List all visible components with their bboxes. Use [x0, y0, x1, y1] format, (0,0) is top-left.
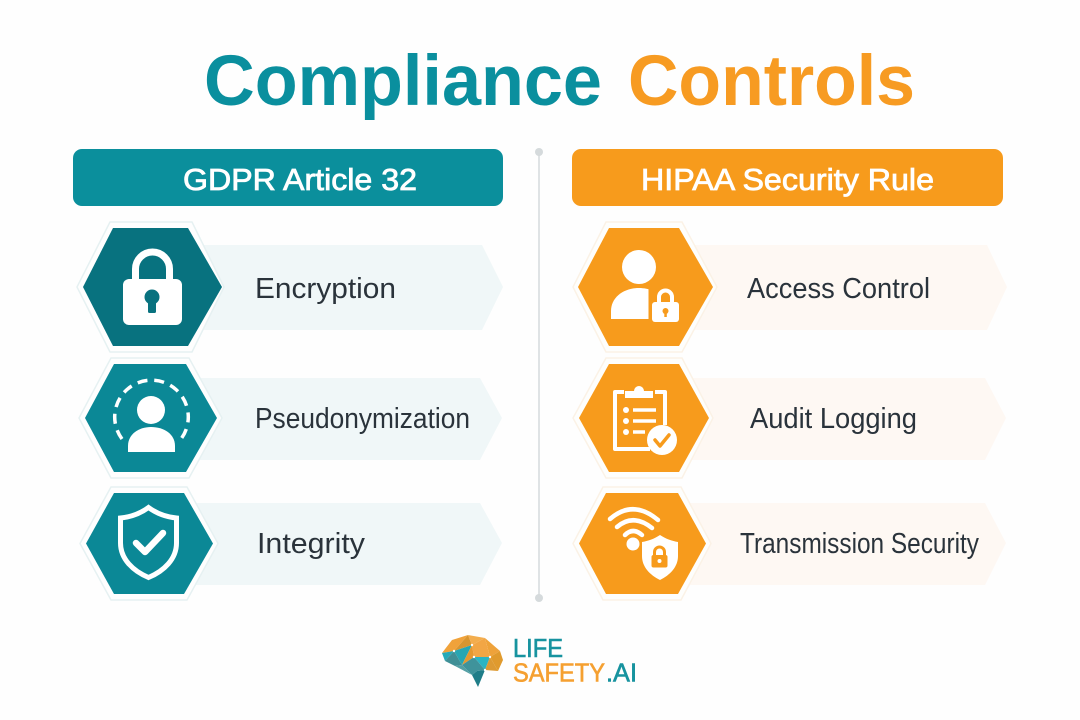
- row: Audit Logging: Audit Logging: [750, 403, 917, 435]
- heading: GDPR Article 32: [73, 149, 503, 206]
- row: Pseudonymization: [79, 358, 502, 478]
- center divider: [535, 148, 543, 602]
- panel: HIPAA Security Rule: [572, 149, 1007, 600]
- heading: HIPAA Security Rule: HIPAA Security Rule: [641, 162, 934, 197]
- icon: clipboard with check: [615, 386, 677, 455]
- icon: low-poly brain: [442, 635, 503, 687]
- icon: user with lock: [611, 250, 682, 325]
- logo: Life Safety AI: LIFE: [513, 635, 563, 663]
- icon: anonymised person: [115, 380, 188, 452]
- title: Controls: [628, 42, 915, 121]
- row: Encryption: Encryption: [255, 273, 396, 305]
- row: Pseudonymization: Pseudonymization: [255, 403, 470, 435]
- logo: Life Safety AI: [442, 635, 637, 688]
- row: Encryption: [77, 222, 503, 352]
- panel: GDPR Article 32: [73, 149, 503, 600]
- row: Transmission Security: [573, 487, 1006, 600]
- icon: shield with check: [120, 508, 176, 578]
- heading: GDPR Article 32: GDPR Article 32: [183, 162, 417, 197]
- row: Integrity: Integrity: [257, 528, 366, 560]
- row: Access Control: [573, 222, 1007, 352]
- logo: Life Safety AI: SAFETY: [513, 660, 605, 688]
- icon: wifi with shield lock: [610, 509, 678, 580]
- row: Transmission Security: Transmission Security: [740, 528, 979, 560]
- row: Integrity: [80, 487, 502, 600]
- title: [204, 42, 915, 121]
- heading: HIPAA Security Rule: [572, 149, 1003, 206]
- logo: Life Safety AI: .AI: [606, 660, 637, 688]
- row: Access Control: Access Control: [747, 273, 930, 305]
- row: Audit Logging: [573, 358, 1006, 478]
- icon: padlock: [123, 252, 182, 325]
- title: Compliance: [204, 42, 602, 121]
